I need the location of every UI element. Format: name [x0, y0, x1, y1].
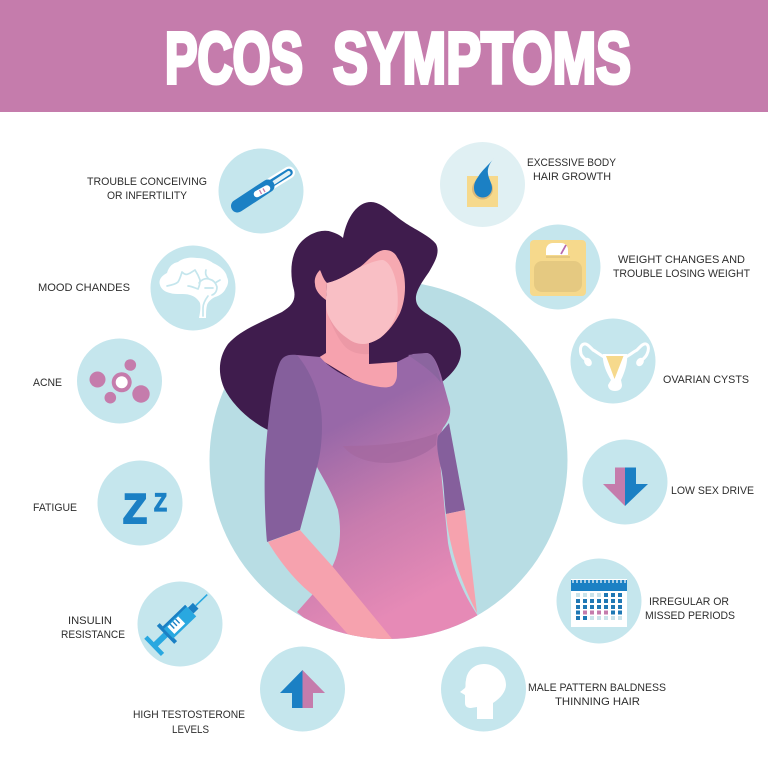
icon: sleep letters: Z — [154, 489, 167, 517]
label: MALE PATTERN BALDNESS — [528, 682, 666, 694]
label — [645, 596, 735, 622]
label — [613, 254, 750, 280]
label: LEVELS — [172, 724, 209, 736]
title — [165, 19, 631, 99]
hair — [220, 202, 461, 440]
icon: uterus — [580, 344, 648, 391]
label: RESISTANCE — [61, 629, 125, 641]
icon: pregnancy test — [238, 172, 289, 206]
icon: hair follicle — [467, 158, 498, 207]
icon: down arrow — [603, 468, 648, 506]
left arm — [268, 530, 393, 640]
label — [61, 615, 125, 641]
item: male pattern baldness — [441, 646, 666, 732]
label: TROUBLE CONCEIVING — [87, 176, 207, 188]
label: IRREGULAR OR — [649, 596, 729, 608]
label: FATIGUE — [33, 502, 77, 514]
item: low sex drive — [582, 440, 754, 524]
header banner — [0, 0, 768, 112]
label: MISSED PERIODS — [645, 610, 735, 622]
label: HIGH TESTOSTERONE — [133, 709, 245, 721]
face — [326, 260, 398, 344]
label: LOW SEX DRIVE — [671, 485, 754, 497]
icon: brain — [160, 258, 228, 318]
icon: sleep letters: Z — [123, 485, 147, 532]
label: WEIGHT CHANGES AND — [618, 254, 745, 266]
item: trouble conceiving — [87, 148, 304, 234]
label: THINNING HAIR — [555, 696, 640, 708]
background circle — [210, 281, 568, 639]
label: EXCESSIVE BODY — [527, 157, 616, 169]
item: insulin resistance — [61, 582, 222, 666]
icon: up arrow — [280, 670, 325, 708]
neck shadow — [328, 315, 369, 354]
face shade layer — [327, 250, 405, 344]
title: SYMPTOMS — [333, 19, 631, 99]
label: MOOD CHANDES — [38, 282, 130, 294]
item: irregular periods — [556, 558, 735, 644]
item: acne — [33, 338, 162, 424]
label — [87, 176, 207, 202]
icon: sleep letters — [123, 485, 167, 532]
right shoulder shade — [408, 353, 441, 383]
icon: syringe — [144, 586, 216, 656]
item: high testosterone — [133, 646, 345, 736]
icon: acne spots — [90, 359, 150, 404]
item: mood changes — [38, 246, 236, 330]
icon: calendar — [571, 579, 627, 627]
item: weight changes — [516, 224, 750, 310]
right sleeve — [437, 423, 465, 514]
ear — [315, 270, 327, 300]
central woman illustration — [210, 202, 568, 660]
item: excessive body hair — [440, 142, 616, 227]
label: OR INFERTILITY — [107, 190, 187, 202]
label: HAIR GROWTH — [533, 171, 611, 183]
title: PCOS — [165, 19, 303, 99]
left sleeve — [265, 355, 322, 542]
dress shadow under bust — [343, 433, 437, 463]
label — [528, 682, 666, 708]
icon: head silhouette — [460, 664, 506, 719]
label: TROUBLE LOSING WEIGHT — [613, 268, 750, 280]
item: ovarian cysts — [570, 318, 749, 404]
icon: bathroom scale — [530, 240, 586, 296]
neck and chest — [318, 296, 400, 396]
label: OVARIAN CYSTS — [663, 374, 749, 386]
item: fatigue — [33, 460, 182, 546]
label — [527, 157, 616, 183]
label: ACNE — [33, 377, 62, 389]
label — [133, 709, 245, 736]
dress — [297, 353, 480, 660]
right arm — [446, 510, 477, 613]
label: INSULIN — [68, 615, 112, 627]
